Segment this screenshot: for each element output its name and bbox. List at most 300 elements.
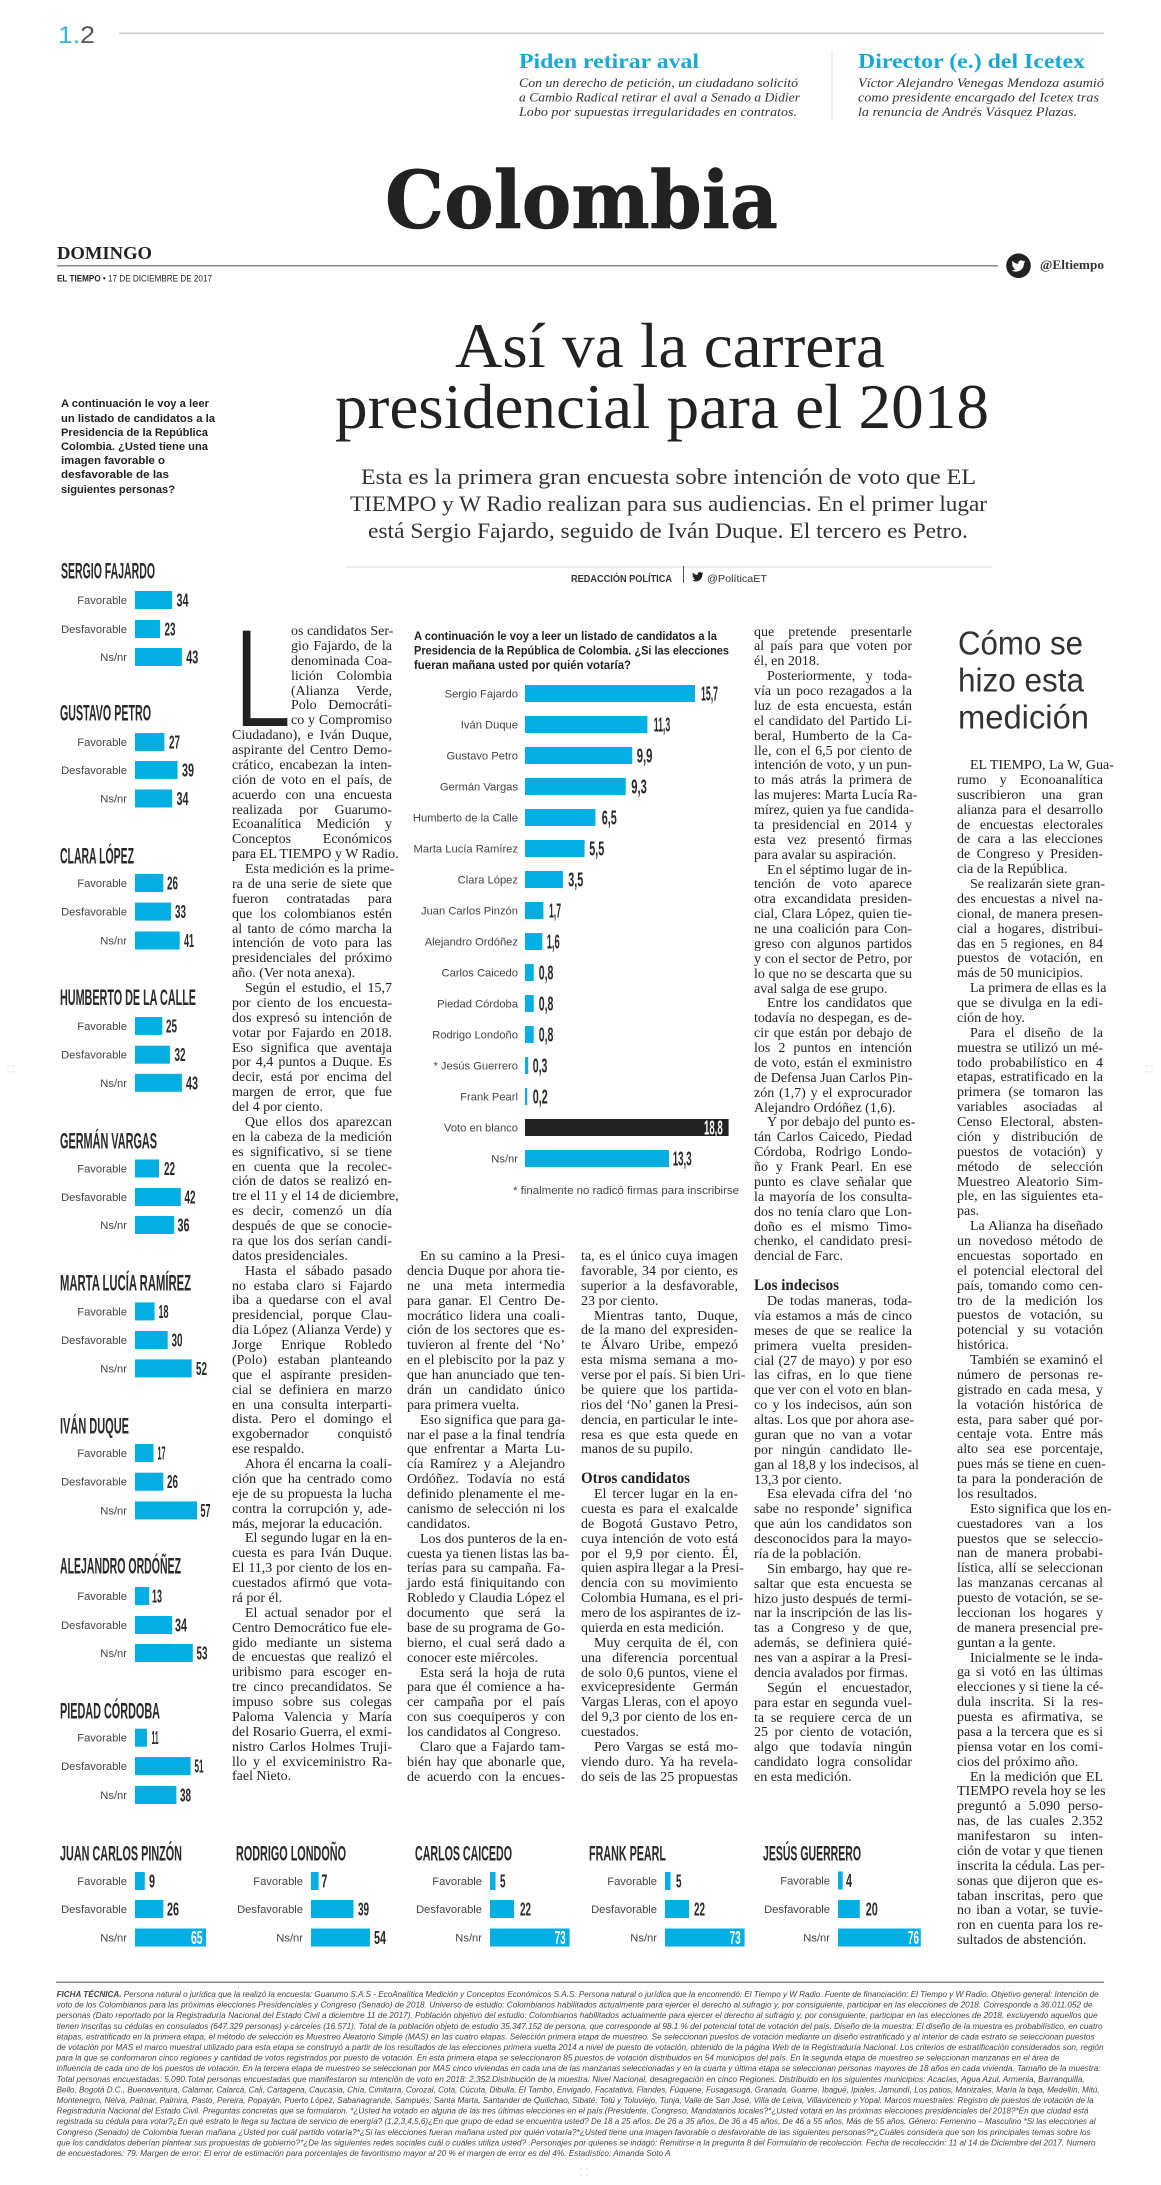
article column 4 bottom: además, se definiera quié- bbox=[754, 1636, 912, 1651]
chart: Piedad Córdoba: Ns/nr bbox=[100, 1790, 127, 1802]
sidebar body: method: gistrado en cada mesa, y bbox=[957, 1383, 1103, 1398]
article column 4 top: chenko, el candidato presi- bbox=[754, 1234, 912, 1249]
article column 4 bottom: guran que no van a votar bbox=[754, 1428, 912, 1443]
article column 1: (Alianza Verde, bbox=[291, 684, 392, 698]
chart: Germán Vargas bbox=[60, 1128, 196, 1236]
technical sheet: etapas, estratificado en la primera etapa, el método de selección es Muestreo Aleatorio Simple (MAS) en las cuatro etapas. Selección primera etapa de muestreo. Se seleccionan puestos de votación mediante un diseño estratificado y al interior de cada estrato se seleccionan puestos bbox=[57, 2031, 1095, 2041]
article column 3 top bbox=[581, 1249, 745, 1457]
article column 3 top: resa es que esta quede en bbox=[581, 1428, 738, 1442]
chart: Frank Pearl: Favorable bbox=[607, 1876, 657, 1888]
sidebar body: method: país, tomando como cen- bbox=[957, 1279, 1103, 1294]
bar chart: voting intention: 0,3 bbox=[533, 1056, 547, 1078]
article column 1: más, mejorar la educación. bbox=[232, 1516, 382, 1532]
article column 4 bottom: algo que todavía ningún bbox=[754, 1740, 912, 1755]
bar chart: voting intention: Ns/nr bbox=[491, 1154, 518, 1166]
chart: Piedad Córdoba: PIEDAD CÓRDOBA bbox=[60, 1698, 160, 1724]
article column 4 bottom: nar la inscripción de las lis- bbox=[754, 1606, 912, 1621]
article column 4 top: vía un poco rezagados a la bbox=[754, 684, 912, 699]
article column 2: los candidatos al Congreso. bbox=[407, 1725, 561, 1740]
article column 4 top: Posteriormente, y toda- bbox=[767, 669, 912, 684]
chart: Juan Carlos Pinzón: 65 bbox=[191, 1928, 202, 1948]
article column 2: mocrático lidera una coali- bbox=[407, 1308, 565, 1324]
question: favorability bbox=[61, 398, 216, 496]
article column 3 top: be quiere que los partida- bbox=[581, 1383, 738, 1398]
article column 3 top: favorable, 34 por ciento, es bbox=[581, 1264, 738, 1279]
sidebar body: method: esta, para saber qué por- bbox=[957, 1412, 1103, 1428]
chart: Iván Duque: Desfavorable bbox=[61, 1477, 127, 1489]
chart: Rodrigo Londoño: Ns/nr bbox=[276, 1932, 303, 1944]
article column 1: cuesta es para Iván Duque. bbox=[232, 1546, 392, 1561]
chart: Humberto de la Calle: 32 bbox=[174, 1045, 186, 1065]
sidebar body: method: la votación histórica de bbox=[957, 1398, 1103, 1413]
chart: Gustavo Petro: Ns/nr bbox=[100, 794, 127, 806]
brief: Director (e.) del Icetex: Director (e.) del Icetex bbox=[858, 49, 1086, 73]
article column 3 top: verse por el país. Si bien Uri- bbox=[581, 1368, 745, 1383]
bar chart: voting intention: Piedad Córdoba bbox=[437, 998, 519, 1010]
bar chart: voting intention: Clara López bbox=[458, 874, 518, 886]
article column 2: En su camino a la Presi- bbox=[420, 1249, 565, 1264]
chart: Rodrigo Londoño: 7 bbox=[321, 1872, 327, 1892]
chart title: voting intention bbox=[414, 631, 729, 672]
headline bbox=[335, 310, 989, 442]
bar chart: voting intention: 15,7 bbox=[701, 684, 718, 706]
chart: Sergio Fajardo: SERGIO FAJARDO bbox=[61, 558, 155, 584]
article column 1: votar por Fajardo en 2018. bbox=[232, 1026, 392, 1041]
chart: Juan Carlos Pinzón: JUAN CARLOS PINZÓN bbox=[60, 1842, 182, 1866]
bar chart: voting intention: Marta Lucía Ramírez bbox=[414, 844, 518, 856]
chart: Gustavo Petro: GUSTAVO PETRO bbox=[60, 700, 151, 726]
chart: Rodrigo Londoño: Favorable bbox=[253, 1876, 303, 1888]
article column 4 top: dencial de Farc. bbox=[754, 1249, 843, 1264]
sidebar body: method: de manera presencial pre- bbox=[957, 1621, 1103, 1636]
article column 4 bottom: hizo justo después de termi- bbox=[754, 1592, 912, 1606]
chart: Rodrigo Londoño: 54 bbox=[374, 1928, 386, 1948]
chart: Jesús Guerrero: Favorable bbox=[780, 1876, 830, 1888]
article column 2: bién hay que abonarle que, bbox=[407, 1755, 565, 1770]
sidebar body: method: cia de la República. bbox=[957, 862, 1067, 877]
sidebar body: method: TIEMPO revela hoy se les bbox=[957, 1784, 1106, 1799]
article column 3 bottom: del 9,3 por ciento de los en- bbox=[581, 1710, 738, 1725]
article column 1: Ahora él encarna la coali- bbox=[245, 1457, 392, 1472]
article column 4 top: aval salga de ese grupo. bbox=[754, 982, 887, 996]
sidebar body: method: dula inscrita. Si la res- bbox=[957, 1695, 1103, 1710]
chart: Jesús Guerrero: JESÚS GUERRERO bbox=[763, 1842, 861, 1866]
sidebar body: method: En la medición que EL bbox=[970, 1770, 1103, 1784]
article column 4 top bbox=[754, 624, 917, 1264]
article column 1: ción de voto en el país, de bbox=[232, 773, 392, 788]
article column 4 top: él, en 2018. bbox=[754, 654, 819, 669]
article column 1: presidenciales del próximo bbox=[232, 951, 392, 966]
chart: Clara López: Favorable bbox=[77, 878, 127, 890]
chart: Marta Lucía Ramírez: Ns/nr bbox=[100, 1363, 127, 1375]
chart: Rodrigo Londoño: RODRIGO LONDOÑO bbox=[236, 1842, 346, 1866]
sidebar body: method: sultados de abstención. bbox=[957, 1933, 1086, 1948]
chart: Juan Carlos Pinzón: 9 bbox=[149, 1872, 155, 1892]
bar chart: voting intention: 5,5 bbox=[589, 838, 604, 860]
article column 1: presidencial, porque Clau- bbox=[232, 1308, 392, 1323]
article column 2: dencia Duque por ahora tie- bbox=[407, 1264, 565, 1279]
chart: Clara López bbox=[60, 844, 194, 951]
text: HUMBERTO DE LA CALLE bbox=[60, 985, 196, 1010]
chart: Jesús Guerrero: 76 bbox=[908, 1928, 919, 1948]
chart: Jesús Guerrero: Ns/nr bbox=[803, 1932, 830, 1944]
sidebar body: method: La Alianza ha diseñado bbox=[970, 1219, 1103, 1234]
article column 1: co y Compromiso bbox=[291, 713, 392, 728]
chart: Piedad Córdoba: Favorable bbox=[77, 1733, 127, 1745]
technical sheet: Total personas encuestadas: 5.090.Total personas encuestadas que manifestaron su intención de voto en 2018: 2.352.Distribución de la muestra: Nivel Nacional, desagregación en cinco Regiones. Distribuido en los siguientes municipios: Acacías, Agua Azul, Armenia, Barranquilla, bbox=[57, 2074, 1085, 2084]
sidebar body: method: ta para la ponderación de bbox=[957, 1472, 1103, 1487]
chart: Alejandro Ordóñez: 13 bbox=[152, 1586, 162, 1606]
bar chart: voting intention: 11,3 bbox=[654, 714, 670, 736]
article column 3 bottom: cuya intención de voto está bbox=[581, 1532, 738, 1547]
text: 51 bbox=[194, 1756, 204, 1776]
article column 4 top: zón (1,7) y el exprocurador bbox=[754, 1086, 912, 1101]
chart: Alejandro Ordóñez: 34 bbox=[175, 1616, 187, 1636]
article column 1: Hasta el sábado pasado bbox=[245, 1264, 392, 1279]
sidebar heading: medición bbox=[958, 698, 1089, 736]
article column 4 bottom: Sin embargo, hay que re- bbox=[767, 1562, 912, 1577]
article column 4 top: mírez, quien ya fue candida- bbox=[754, 803, 914, 818]
chart: Juan Carlos Pinzón bbox=[60, 1842, 206, 1948]
chart: Humberto de la Calle: Desfavorable bbox=[61, 1050, 127, 1062]
bar chart: voting intention: 13,3 bbox=[673, 1148, 692, 1170]
article column 1: de encuestas que realizó el bbox=[232, 1650, 392, 1665]
sidebar body: method: de Congreso y Presiden- bbox=[957, 847, 1103, 862]
bar chart: voting intention: 0,8 bbox=[539, 994, 553, 1016]
headline: Así va la carrera bbox=[455, 310, 885, 381]
chart: Marta Lucía Ramírez: MARTA LUCÍA RAMÍREZ bbox=[60, 1270, 191, 1296]
chart: Piedad Córdoba: 11 bbox=[152, 1728, 158, 1748]
heading: Los indecisos: Los indecisos bbox=[754, 1277, 839, 1294]
article column 3 bottom: Vargas Lleras, con el apoyo bbox=[581, 1695, 738, 1710]
bar chart: voting intention: 0,2 bbox=[533, 1086, 548, 1108]
chart: Frank Pearl: Ns/nr bbox=[630, 1932, 657, 1944]
sidebar body: method: tro de la medición los bbox=[957, 1294, 1103, 1308]
article column 1: fueron contratadas para bbox=[232, 892, 392, 907]
article column 3 bottom bbox=[581, 1487, 744, 1785]
chart: Juan Carlos Pinzón: 26 bbox=[167, 1900, 179, 1920]
sidebar heading: Cómo se bbox=[958, 624, 1083, 662]
question: favorability: siguientes personas? bbox=[61, 484, 175, 496]
chart: Iván Duque: 26 bbox=[167, 1472, 178, 1492]
chart: Jesús Guerrero: 4 bbox=[846, 1871, 852, 1891]
article column 1: que los colombianos estén bbox=[232, 907, 392, 922]
brief: Director (e.) del Icetex: Víctor Alejandro Venegas Mendoza asumió bbox=[858, 75, 1105, 90]
chart: Sergio Fajardo: 34 bbox=[176, 590, 188, 610]
brief: Piden retirar aval bbox=[518, 49, 801, 119]
article column 4 bottom: De todas maneras, toda- bbox=[767, 1294, 912, 1309]
article column 3 top: Mientras tanto, Duque, bbox=[594, 1308, 738, 1324]
chart: Germán Vargas: 42 bbox=[184, 1188, 196, 1208]
article column 1: aspirante del Centro Demo- bbox=[232, 743, 392, 758]
brief: Director (e.) del Icetex bbox=[858, 49, 1105, 119]
article column 1: Que ellos dos aparezcan bbox=[245, 1115, 392, 1130]
chart: Humberto de la Calle: Ns/nr bbox=[100, 1078, 127, 1090]
article column 4 top: dos no tenía claro que Lon- bbox=[754, 1205, 912, 1220]
article column 1: del Rosario Guerra, el exmi- bbox=[232, 1725, 392, 1740]
article column 2: Eso significa que para ga- bbox=[420, 1413, 565, 1428]
article column 4 bottom: cial (27 de mayo) y por eso bbox=[754, 1354, 912, 1368]
bar chart: voting intention: Iván Duque bbox=[461, 720, 518, 732]
brief: Piden retirar aval: Piden retirar aval bbox=[519, 49, 699, 73]
article column 3 bottom: cuestados. bbox=[581, 1725, 639, 1740]
article column 1: ra de una serie de siete que bbox=[232, 877, 392, 892]
sidebar body: method: nan de manera probabi- bbox=[957, 1546, 1103, 1561]
article column 1: llo y el exviceministro Ra- bbox=[232, 1754, 392, 1770]
sidebar body: method: potencial y su votación bbox=[957, 1323, 1103, 1338]
article column 4 top: cial, Clara López, quien tie- bbox=[754, 907, 912, 922]
chart: Gustavo Petro: Desfavorable bbox=[61, 765, 127, 777]
article column 2: nar el pase a la final tendría bbox=[407, 1428, 565, 1442]
sidebar body: method: Inicialmente se le inda- bbox=[970, 1650, 1103, 1666]
chart: Piedad Córdoba bbox=[60, 1698, 204, 1806]
article column 2: ción de los sectores que es- bbox=[407, 1323, 565, 1338]
bar chart: voting intention: Rodrigo Londoño bbox=[432, 1030, 518, 1042]
chart: Carlos Caicedo: 73 bbox=[555, 1928, 566, 1948]
chart: Carlos Caicedo: Desfavorable bbox=[416, 1904, 482, 1916]
sidebar body: method: Para el diseño de la bbox=[970, 1026, 1103, 1041]
article column 4 top: para avalar su aspiración. bbox=[754, 848, 896, 863]
technical sheet bbox=[56, 1989, 1104, 2158]
chart: Carlos Caicedo: CARLOS CAICEDO bbox=[415, 1842, 512, 1866]
article column 2: para primera vuelta. bbox=[407, 1398, 519, 1413]
article column 4 top: tán Carlos Caicedo, Piedad bbox=[754, 1130, 912, 1145]
article column 1: Eso significa que aventaja bbox=[232, 1040, 392, 1056]
technical sheet: Bello, Bogotá D.C., Buenaventura, Calamar, Calarcá, Cali, Cartagena, Caucasia, Chía, Cimitarra, Corozal, Cota, Cúcuta, Dibulla, El Tambo, Envigado, Facatativá, Flandes, Fúquene, Fusagasugá, Granada, Guarne, Ibagué, Ipiales, Jamundí, Los patios, Manizales, María la baja, Medellín, Mitú, bbox=[57, 2084, 1100, 2094]
article column 1: fael Nieto. bbox=[232, 1769, 291, 1784]
article column 3 top: te Álvaro Uribe, empezó bbox=[581, 1338, 738, 1353]
article column 1: tre el 11 y el 14 de diciembre, bbox=[232, 1189, 399, 1204]
article column 1: ra que los dos serían candi- bbox=[232, 1234, 392, 1249]
technical sheet: para la que se conformaron cinco regiones y cantidad de votos registrados por puesto de votación. En esta primera etapa se seleccionaron 85 puestos de votación distribuidos en 54 municipios del país. En la segunda etapa de muestreo se seleccionan manzanas en el área de bbox=[56, 2053, 1060, 2063]
sidebar body: method: ción y distribución de bbox=[957, 1130, 1103, 1145]
article column 1: tre cinco precandidatos. Se bbox=[232, 1680, 392, 1695]
article column 2: drán un candidato único bbox=[407, 1383, 565, 1398]
chart: Iván Duque: Favorable bbox=[77, 1448, 127, 1460]
sidebar body: method: La primera de ellas es la bbox=[970, 981, 1106, 996]
article column 1: ese respaldo. bbox=[232, 1442, 304, 1457]
chart: Carlos Caicedo bbox=[415, 1842, 570, 1948]
byline: @PolíticaET bbox=[707, 573, 768, 585]
article column 4 top: doño es el mismo Timo- bbox=[754, 1220, 912, 1234]
sidebar body: method: pues más se tiene en cuen- bbox=[957, 1457, 1106, 1472]
article column 3 bottom: Muy cerquita de él, con bbox=[594, 1636, 738, 1651]
article column 4 top: la mayoría de los consulta- bbox=[754, 1190, 912, 1205]
chart: Clara López: 33 bbox=[175, 902, 186, 922]
chart: Iván Duque: Ns/nr bbox=[100, 1505, 127, 1517]
question: favorability: A continuación le voy a leer bbox=[61, 398, 210, 410]
sidebar body: method: encuestas soportado en bbox=[957, 1249, 1103, 1264]
article column 4 bottom: tas a Congreso y de que, bbox=[754, 1621, 912, 1636]
chart title: voting intention: Presidencia de la República de Colombia. ¿Si las elecciones bbox=[414, 646, 729, 658]
chart: Sergio Fajardo bbox=[61, 558, 198, 668]
article column 4 top: lle, con el 6,5 por ciento de bbox=[754, 744, 912, 758]
article column 1 bbox=[232, 624, 399, 1784]
article column 1: intención de voto para las bbox=[232, 936, 392, 951]
sidebar body: method: lística, allí se seleccionan bbox=[957, 1561, 1103, 1576]
article column 1: Conceptos Económicos bbox=[232, 832, 392, 847]
sidebar body: method: taban inscritas, pero que bbox=[957, 1888, 1103, 1904]
chart: Piedad Córdoba: 38 bbox=[180, 1786, 191, 1806]
article column 1: gido mediante un sistema bbox=[232, 1636, 392, 1650]
article column 1: para EL TIEMPO y W Radio. bbox=[232, 847, 399, 862]
article column 4 top: al país para que voten por bbox=[754, 639, 912, 654]
bar chart: voting intention: Germán Vargas bbox=[440, 782, 518, 794]
bar chart: voting intention: 6,5 bbox=[602, 808, 617, 830]
article column 2 bbox=[406, 1249, 569, 1785]
article column 4 bottom: ría de la población. bbox=[754, 1547, 861, 1562]
bar chart: voting intention: Alejandro Ordóñez bbox=[425, 936, 518, 948]
article column 4 bottom: las cifras, en lo que tiene bbox=[754, 1368, 912, 1383]
article column 3 bottom: El tercer lugar en la en- bbox=[594, 1487, 738, 1502]
article column 2: canismo de selección ni los bbox=[407, 1502, 565, 1517]
sidebar body: method: ción de votar y que tienen bbox=[957, 1844, 1103, 1859]
bar chart: voting intention: 9,3 bbox=[631, 776, 647, 798]
bar chart: voting intention: 1,6 bbox=[547, 932, 560, 954]
article column 2: Esta será la hoja de ruta bbox=[420, 1666, 565, 1680]
article column 1: Ciudadano), e Iván Duque, bbox=[232, 728, 392, 743]
article column 1: eje de su propuesta la lucha bbox=[232, 1487, 392, 1502]
subheadline: está Sergio Fajardo, seguido de Iván Duque. El tercero es Petro. bbox=[368, 518, 968, 543]
technical sheet: que los candidatos deberían plantear sus propuestas de gobierno?*¿De las siguientes redes sociales cuál o cuáles utiliza usted? .Personajes por quienes se indagó: Remitirse a la pregunta 8 del Formulario de recolección. Fecha de recolección: 11 al 14 de Diciembre del 2017. Numero bbox=[57, 2137, 1096, 2147]
chart: Jesús Guerrero bbox=[763, 1842, 921, 1948]
article column 1: en la cabeza de la medición bbox=[232, 1130, 392, 1145]
byline: REDACCIÓN POLÍTICA bbox=[571, 572, 672, 585]
chart: Alejandro Ordóñez: 53 bbox=[196, 1644, 208, 1664]
sidebar body: method: método de selección bbox=[957, 1160, 1103, 1175]
article column 3 bottom: mero de los aspirantes de iz- bbox=[581, 1606, 741, 1621]
article column 1: rá por él. bbox=[232, 1591, 282, 1606]
article column 2: para que él comience a ha- bbox=[407, 1680, 565, 1695]
article column 1: iba a quedarse con el aval bbox=[232, 1293, 392, 1308]
chart: Jesús Guerrero: Desfavorable bbox=[764, 1904, 830, 1916]
chart: Alejandro Ordóñez: ALEJANDRO ORDÓÑEZ bbox=[60, 1554, 181, 1578]
article column 1: crático, encabezan la inten- bbox=[232, 758, 392, 773]
sidebar body: method: elecciones y si tiene la cé- bbox=[957, 1680, 1104, 1695]
article column 1: Ecoanalítica Medición y bbox=[232, 817, 392, 832]
article column 1: cuestados afirmó que vota- bbox=[232, 1576, 392, 1591]
bar chart: voting intention: 9,9 bbox=[637, 746, 652, 768]
article column 1: lición Colombia bbox=[291, 669, 392, 684]
sidebar body: method: etapas, estratificado en la bbox=[957, 1070, 1103, 1085]
article column 1: que el aspirante presiden- bbox=[232, 1368, 392, 1383]
sidebar body: method: des encuestas a nivel na- bbox=[957, 892, 1103, 907]
article column 2: que enfrentar a Marta Lu- bbox=[407, 1442, 565, 1457]
article column 4 top: los 2 puntos en intención bbox=[754, 1041, 912, 1056]
article column 1: ción de datos se realizó en- bbox=[232, 1174, 392, 1189]
article column 3 bottom: quierda en esta medición. bbox=[581, 1621, 724, 1636]
sidebar body: method: ron en cuenta para los re- bbox=[957, 1918, 1103, 1933]
article column 3 bottom: do seis de las 25 propuestas bbox=[581, 1770, 738, 1785]
article column 1: Según el estudio, el 15,7 bbox=[245, 981, 392, 996]
chart: Frank Pearl: 73 bbox=[730, 1928, 741, 1948]
article column 1: Polo Democráti- bbox=[291, 698, 392, 713]
headline: presidencial para el 2018 bbox=[335, 371, 989, 442]
brief: Director (e.) del Icetex: como presidente encargado del Icetex tras bbox=[858, 90, 1099, 104]
article column 3 bottom: dencia con su movimiento bbox=[581, 1576, 738, 1591]
sidebar body: method: el potencial electoral del bbox=[957, 1264, 1103, 1279]
subheadline bbox=[350, 464, 988, 543]
article column 4 bottom: candidato logra consolidar bbox=[754, 1755, 912, 1770]
sidebar body: method: de cara a las elecciones bbox=[957, 832, 1103, 847]
article column 4 top: otra excandidata presiden- bbox=[754, 892, 912, 907]
chart: Gustavo Petro: 27 bbox=[169, 732, 180, 752]
article column 3 top: 23 por ciento. bbox=[581, 1294, 658, 1309]
article column 3 bottom: cuesta es para el exalcalde bbox=[581, 1502, 738, 1517]
chart: Clara López: Desfavorable bbox=[61, 907, 127, 919]
sidebar body: method: cios del próximo año. bbox=[957, 1755, 1078, 1770]
article column 3 bottom: una diferencia porcentual bbox=[581, 1651, 738, 1666]
technical sheet: voto de los Colombianos para las próximas elecciones Presidenciales y Congreso (Senado) de 2018. Universo de estudio: Colombianos habilitados actualmente para ejercer el derecho al sufragio y, por consiguiente, participar en las elecciones de 2018. Corresponde a 36.011.052 de bbox=[57, 2000, 1093, 2010]
article column 1: año. (Ver nota anexa). bbox=[232, 966, 355, 981]
chart: Iván Duque bbox=[60, 1414, 210, 1521]
article column 4 top: ta presidencial en 2014 y bbox=[754, 818, 912, 833]
article column 2: de acuerdo con la encues- bbox=[407, 1770, 565, 1785]
sidebar body: method: que se divulga en la edi- bbox=[957, 996, 1103, 1011]
twitter handle: @Eltiempo bbox=[1040, 258, 1104, 272]
article column 4 top: todavía no despegan, es de- bbox=[754, 1011, 912, 1026]
chart: Piedad Córdoba: Desfavorable bbox=[61, 1761, 127, 1773]
article column 3 top: ta, es el único cuya imagen bbox=[581, 1249, 738, 1264]
technical sheet: influencia de cada uno de los puestos de votación. En la tercera etapa de muestreo se seleccionan por MAS cinco viviendas en cada una de las manzanas seleccionadas y en la cuarta y última etapa se seleccionan personas mayores de 18 años en cada vivienda. Tamaño de la muestra: bbox=[57, 2063, 1101, 2073]
article column 1: gio Fajardo, de la bbox=[291, 639, 392, 654]
article column 4 top: esta vez presentó firmas bbox=[754, 833, 912, 848]
article column 2: conocer este miércoles. bbox=[407, 1651, 538, 1666]
technical sheet: Congreso (Senado) de Colombia fueran mañana ¿Usted por cuál partido votaría?*¿Si las elecciones fueran mañana usted por quién votaría?*¿Usted tiene una imagen favorable o desfavorable de las siguientes personas?*¿Cuáles considera que son los principales temas sobre los bbox=[57, 2127, 1091, 2137]
sidebar body: method: muestra se utilizó un mé- bbox=[957, 1041, 1103, 1056]
chart: Carlos Caicedo: 5 bbox=[500, 1872, 506, 1892]
sidebar body: method: preguntó a 5.090 perso- bbox=[957, 1799, 1103, 1814]
chart: Marta Lucía Ramírez bbox=[60, 1270, 207, 1379]
article column 4 top: y con el sector de Petro, por bbox=[754, 952, 912, 967]
chart: Gustavo Petro bbox=[60, 700, 194, 809]
day label: DOMINGO bbox=[57, 243, 152, 263]
bar chart: voting intention: Voto en blanco bbox=[444, 1122, 518, 1134]
sidebar body: method: cuestadores van a los bbox=[957, 1517, 1103, 1532]
article column 2: base de su programa de Go- bbox=[407, 1621, 565, 1636]
article column 4 top: de voto, están el exministro bbox=[754, 1056, 912, 1071]
chart: Humberto de la Calle: 25 bbox=[166, 1016, 177, 1036]
article column 1: en cuenta que la recolec- bbox=[232, 1160, 392, 1174]
article column 1: dista. Pero el domingo el bbox=[232, 1412, 392, 1427]
question: favorability: Presidencia de la República bbox=[61, 427, 209, 439]
text: 41 bbox=[184, 931, 194, 951]
brief: Piden retirar aval: Lobo por supuestas irregularidades en contratos. bbox=[518, 104, 797, 119]
article column 4 bottom: gan al 18,8 y los indecisos, al bbox=[754, 1458, 919, 1473]
article column 1: nistro Carlos Holmes Truji- bbox=[232, 1740, 392, 1755]
article column 4 bottom: dencia avalados por firmas. bbox=[754, 1666, 908, 1681]
article column 2: que han anunciado que ten- bbox=[407, 1368, 565, 1383]
article column 1: realizada por Guarumo- bbox=[232, 802, 392, 818]
chart: Carlos Caicedo: Favorable bbox=[432, 1876, 482, 1888]
article column 1: acuerdo con una encuesta bbox=[232, 788, 392, 803]
article column 3 top: esta misma semana a mo- bbox=[581, 1353, 738, 1368]
chart: Rodrigo Londoño bbox=[236, 1842, 386, 1948]
chart: Humberto de la Calle: Favorable bbox=[77, 1021, 127, 1033]
sidebar body: method: ción de hoy. bbox=[957, 1011, 1025, 1026]
sidebar heading bbox=[958, 624, 1089, 736]
article column 4 top: Entre los candidatos que bbox=[767, 996, 912, 1011]
chart: Marta Lucía Ramírez: 30 bbox=[172, 1330, 182, 1350]
article column 3 top: rios del ‘No’ ganen la Presi- bbox=[581, 1398, 738, 1413]
chart: Frank Pearl: FRANK PEARL bbox=[589, 1842, 666, 1866]
chart: Marta Lucía Ramírez: Desfavorable bbox=[61, 1335, 127, 1347]
article column 4 top: ño y Frank Pearl. En ese bbox=[754, 1160, 912, 1175]
sidebar body: method: inscrita la cédula. Las per- bbox=[957, 1859, 1105, 1874]
article column 4 top: En el séptimo lugar de in- bbox=[767, 862, 912, 878]
article column 1: por 4,4 puntos a Duque. Es bbox=[232, 1055, 392, 1070]
article column 4 bottom: primera vuelta presiden- bbox=[754, 1339, 912, 1354]
